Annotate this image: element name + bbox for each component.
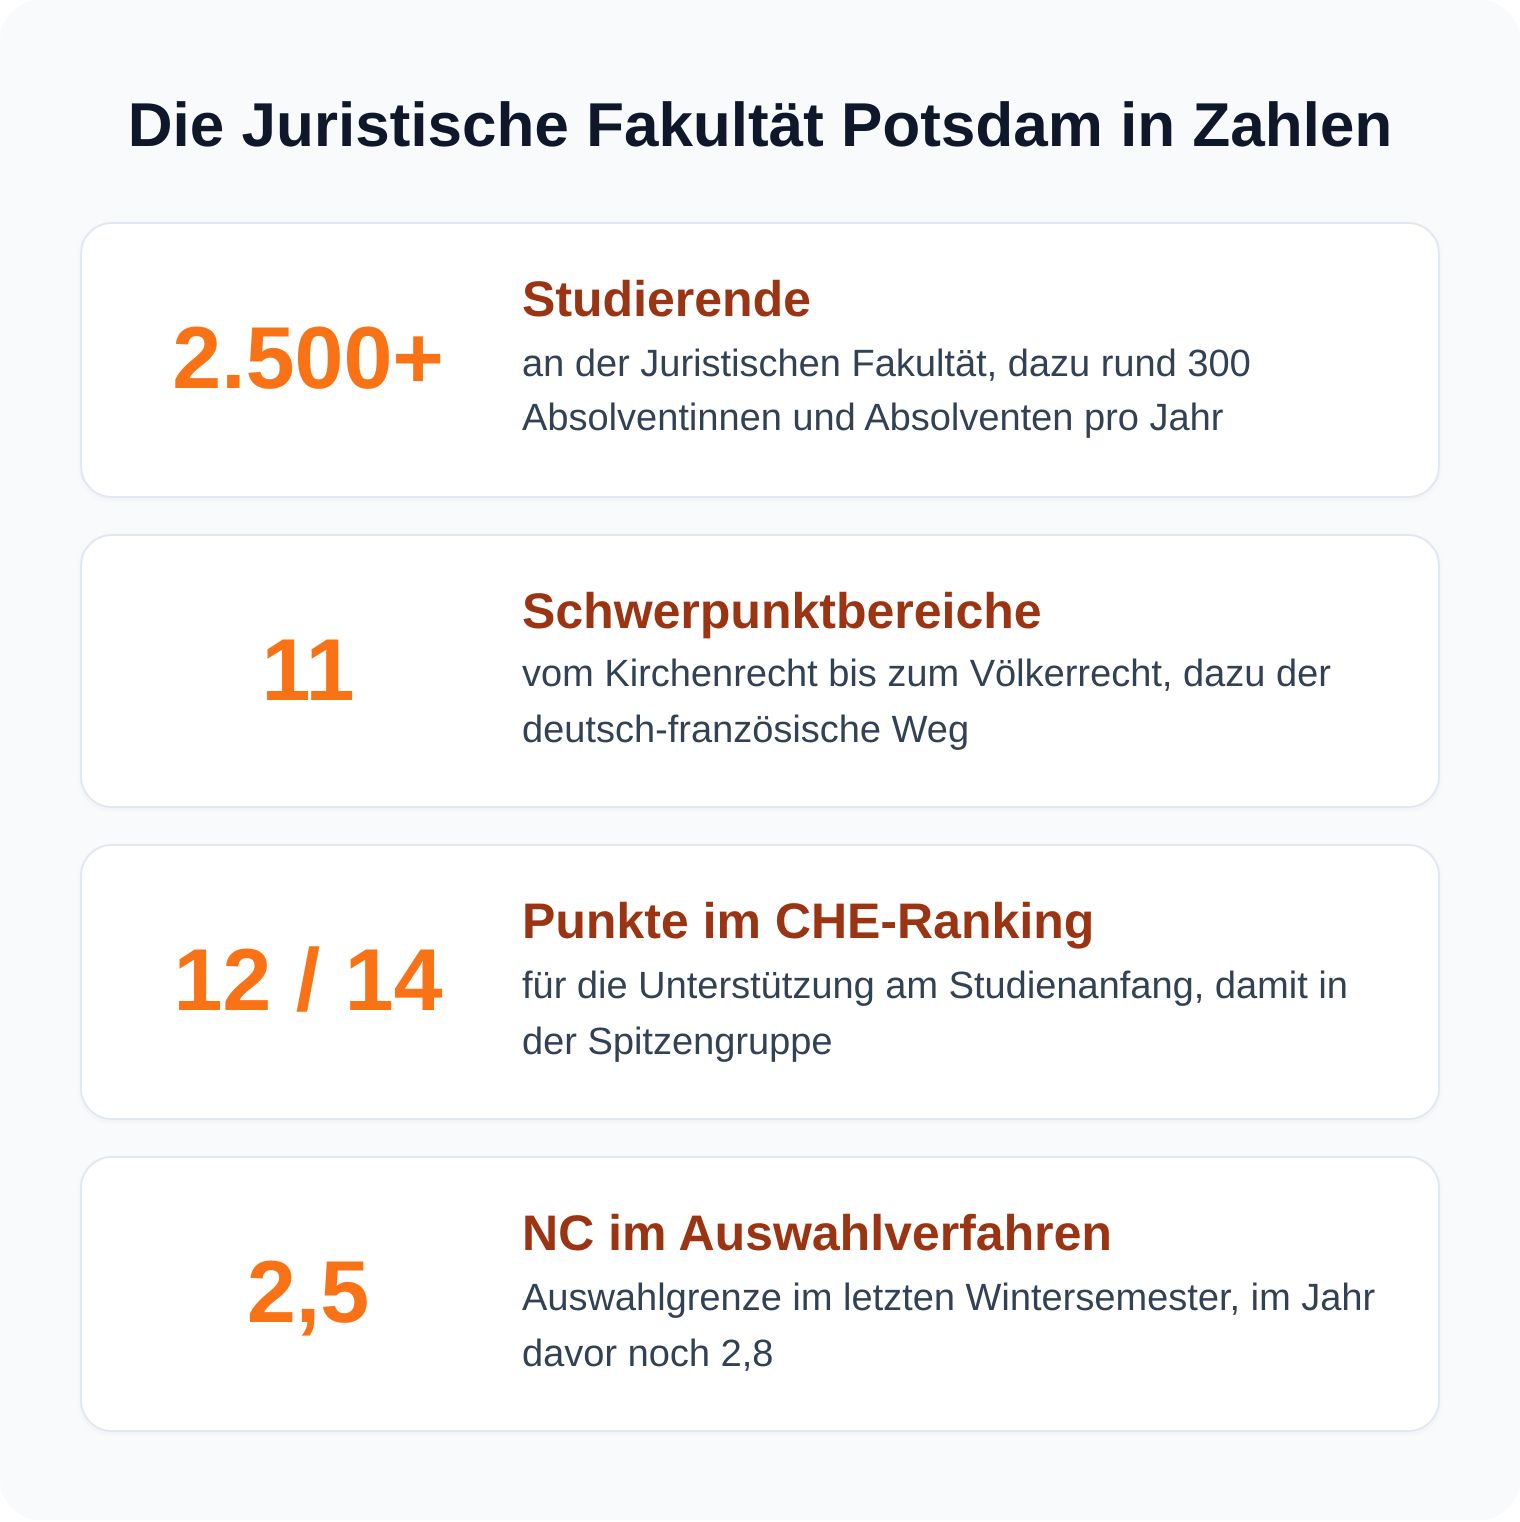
big number: 12 / 14: 12 / 14 [173, 930, 443, 1029]
big number: 2.500+: 2.500+ [172, 308, 444, 407]
big number: 2,5: 2,5 [247, 1242, 369, 1341]
description line 2: davor noch 2,8 [522, 1333, 773, 1375]
panel: Schwerpunktbereiche [80, 534, 1440, 808]
text block: CHE-Ranking [522, 893, 1348, 1063]
text block: Schwerpunktbereiche [522, 583, 1331, 751]
description line 1: an der Juristischen Fakultät, dazu rund 300 [522, 343, 1251, 385]
description line 2: der Spitzengruppe [522, 1021, 833, 1063]
heading: Schwerpunktbereiche: Schwerpunktbereiche [522, 583, 1042, 639]
panel: Studierende [80, 222, 1440, 498]
title: Die Juristische Fakultät Potsdam in Zahlen [128, 91, 1392, 160]
heading: NC im Auswahlverfahren: NC im Auswahlverfahren [522, 1205, 1112, 1261]
text block: Studierende [522, 271, 1251, 439]
heading: Punkte im CHE-Ranking: Punkte im CHE-Ranking [522, 893, 1094, 949]
panel: CHE-Ranking [80, 844, 1440, 1120]
description line 1: Auswahlgrenze im letzten Wintersemester, im Jahr [522, 1277, 1375, 1319]
panel: NC im Auswahlverfahren [80, 1156, 1440, 1432]
description line 2: deutsch-französische Weg [522, 709, 969, 751]
description line 1: für die Unterstützung am Studienanfang, damit in [522, 965, 1348, 1007]
description line 1: vom Kirchenrecht bis zum Völkerrecht, dazu der [522, 653, 1331, 695]
description line 2: Absolventinnen und Absolventen pro Jahr [522, 397, 1223, 439]
text block: NC im Auswahlverfahren [522, 1205, 1375, 1375]
big number: 11: 11 [261, 620, 355, 719]
heading: Studierende: Studierende [522, 271, 811, 327]
